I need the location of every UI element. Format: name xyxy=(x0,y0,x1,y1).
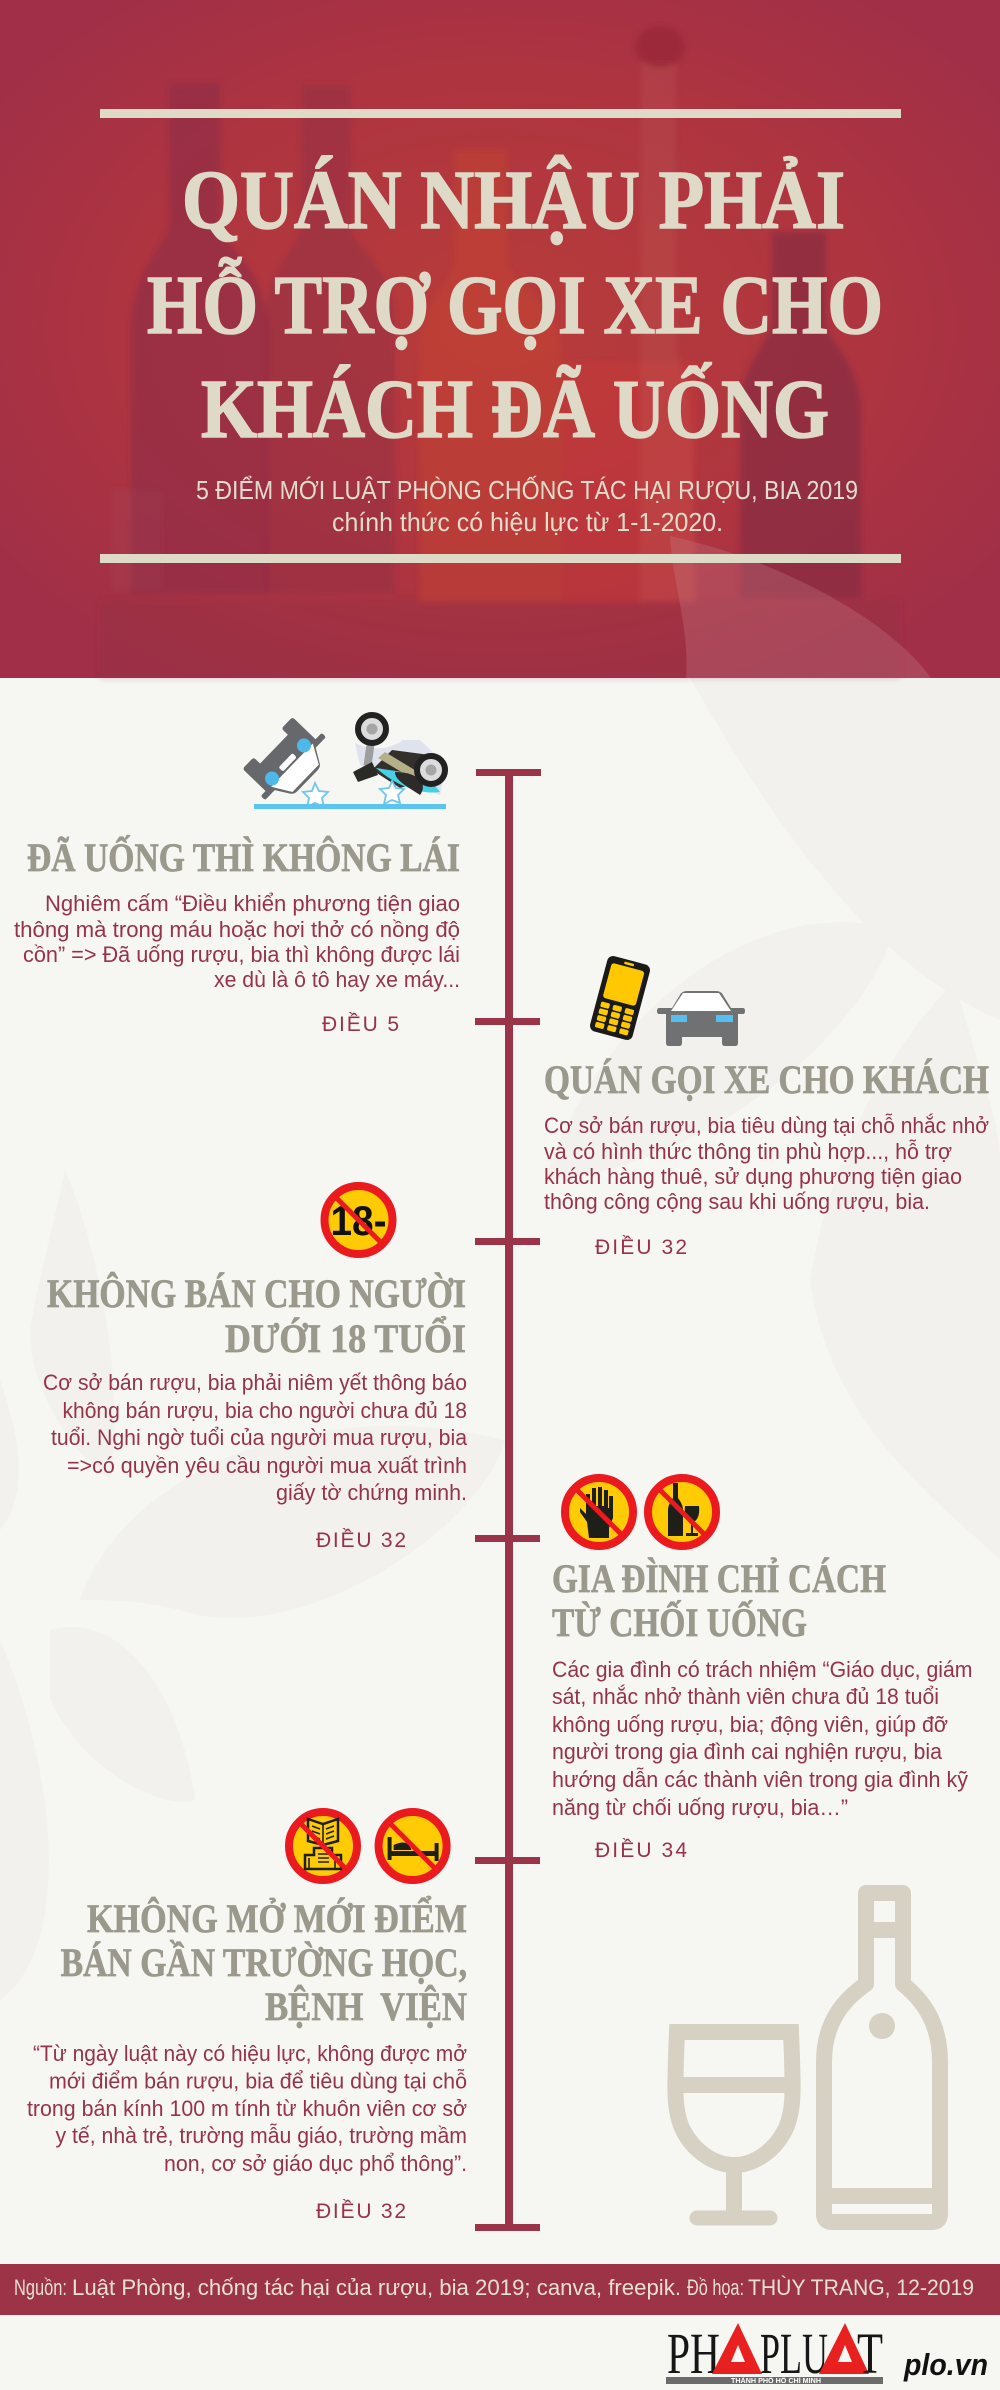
heading xyxy=(552,1556,886,1645)
body text xyxy=(544,1113,989,1214)
panel: drink and do not drive xyxy=(14,711,460,1036)
background leaf pattern xyxy=(0,678,1000,2000)
icon: mobile phone xyxy=(589,955,651,1041)
footer band: Nguồn: xyxy=(14,2275,67,2300)
footer band xyxy=(0,2264,1000,2315)
logo: Pháp Luật: PLU xyxy=(760,2321,828,2386)
body text: giấy tờ chứng minh. xyxy=(276,1480,467,1505)
heading: KHÔNG MỞ MỚI ĐIỂM xyxy=(87,1895,467,1941)
body text: Cơ sở bán rượu, bia phải niêm yết thông báo xyxy=(43,1370,467,1395)
body text: =>có quyền yêu cầu người mua xuất trình xyxy=(67,1453,467,1478)
body text: cồn” => Đã uống rượu, bia thì không được lái xyxy=(23,942,460,967)
icon: road line xyxy=(254,804,446,809)
heading: GIA ĐÌNH CHỈ CÁCH xyxy=(552,1556,886,1601)
footer band: THÙY TRANG, 12-2019 xyxy=(748,2275,974,2300)
heading: BÁN GẦN TRƯỜNG HỌC, xyxy=(61,1940,467,1985)
article reference: ĐIỀU 34 xyxy=(595,1839,687,1862)
title: KHÁCH ĐÃ UỐNG xyxy=(201,361,829,456)
panel: no sale to under 18 xyxy=(43,1186,468,1552)
header banner with bottle photo xyxy=(0,0,1000,678)
heading: KHÔNG BÁN CHO NGƯỜI xyxy=(47,1271,466,1316)
bottle outline xyxy=(824,1893,940,2222)
top header rule xyxy=(100,109,901,118)
title xyxy=(147,154,883,456)
article reference: ĐIỀU 32 xyxy=(316,2200,406,2223)
icon: under 18 prohibited sign: 18- xyxy=(330,1197,386,1244)
icon: car front xyxy=(657,991,745,1046)
logo: Pháp Luật: THÀNH PHỐ HỒ CHÍ MINH xyxy=(731,2375,821,2385)
panel: no new outlets near schools and hospitals xyxy=(27,1812,467,2223)
body text: tuổi. Nghi ngờ tuổi của người mua rượu, bia xyxy=(51,1425,468,1450)
logo: plo.vn: plo.vn xyxy=(903,2347,988,2382)
header leaf highlight xyxy=(670,536,931,678)
bottom header rule xyxy=(100,554,901,563)
body text: trong bán kính 100 m tính từ khuôn viên cơ sở xyxy=(27,2096,467,2121)
wine glass outline xyxy=(675,2032,793,2165)
logo: Pháp Luật: PH xyxy=(667,2321,720,2386)
panel: families teach how to refuse xyxy=(552,1478,972,1862)
article reference: ĐIỀU 32 xyxy=(595,1236,687,1259)
body text: mới điểm bán rượu, bia để tiêu dùng tại chỗ xyxy=(49,2068,467,2094)
title: HỖ TRỢ GỌI XE CHO xyxy=(147,255,883,352)
logo: Pháp Luật: T xyxy=(857,2321,883,2386)
body text: xe dù là ô tô hay xe máy... xyxy=(214,967,460,992)
body text: Cơ sở bán rượu, bia tiêu dùng tại chỗ nhắc nhở xyxy=(544,1113,989,1138)
body text: Nghiêm cấm “Điều khiển phương tiện giao xyxy=(45,891,460,916)
body text: y tế, nhà trẻ, trường mẫu giáo, trường mầm xyxy=(56,2123,467,2148)
title: QUÁN NHẬU PHẢI xyxy=(182,154,845,247)
heading xyxy=(47,1271,466,1361)
body text: khách hàng thuê, sử dụng phương tiện giao xyxy=(544,1164,962,1189)
heading: DƯỚI 18 TUỔI xyxy=(225,1315,466,1361)
heading: TỪ CHỐI UỐNG xyxy=(552,1599,807,1645)
body text: thông mà trong máu hoặc hơi thở có nồng độ xyxy=(14,917,460,942)
body text: năng từ chối uống rượu, bia…” xyxy=(552,1795,848,1820)
article reference: ĐIỀU 5 xyxy=(322,1013,399,1036)
body text: không bán rượu, bia cho người chưa đủ 18 xyxy=(62,1398,467,1423)
body text: người trong gia đình cai nghiện rượu, bia xyxy=(552,1739,943,1764)
logo: Pháp Luật xyxy=(666,2321,883,2386)
heading: ĐÃ UỐNG THÌ KHÔNG LÁI xyxy=(27,834,460,880)
heading xyxy=(61,1895,467,2029)
icon: wine glass and bottle xyxy=(675,1893,942,2222)
icon: overturned motorbike xyxy=(353,715,446,804)
body text: hướng dẫn các thành viên trong gia đình kỹ xyxy=(552,1767,968,1792)
icon: overturned car xyxy=(238,711,338,812)
icon: no hospital bed sign xyxy=(379,1812,447,1880)
article reference: ĐIỀU 32 xyxy=(316,1529,406,1552)
body text: không uống rượu, bia; động viên, giúp đỡ xyxy=(552,1712,948,1737)
body text: Các gia đình có trách nhiệm “Giáo dục, giám xyxy=(552,1657,972,1682)
body text xyxy=(552,1657,972,1820)
icon: no alcohol sign xyxy=(648,1478,716,1546)
subtitle: chính thức có hiệu lực từ 1-1-2020. xyxy=(332,507,723,537)
body text: và có hình thức thông tin phù hợp..., hỗ trợ xyxy=(544,1139,952,1164)
body text xyxy=(14,891,460,992)
timeline xyxy=(475,769,541,2231)
icon: under 18 prohibited sign xyxy=(324,1186,392,1254)
footer band: Luật Phòng, chống tác hại của rượu, bia 2019; canva, freepik. xyxy=(72,2275,681,2300)
subtitle xyxy=(196,475,858,537)
subtitle: 5 ĐIỂM MỚI LUẬT PHÒNG CHỐNG TÁC HẠI RƯỢU, BIA 2019 xyxy=(196,475,858,505)
body text: “Từ ngày luật này có hiệu lực, không được mở xyxy=(33,2041,467,2066)
body text: sát, nhắc nhở thành viên chưa đủ 18 tuổi xyxy=(552,1684,939,1709)
body text xyxy=(27,2041,467,2176)
body text: non, cơ sở giáo dục phổ thông”. xyxy=(164,2151,467,2176)
icon: no school sign xyxy=(289,1812,357,1880)
footer band: Đồ họa: xyxy=(687,2275,744,2300)
panel: bar calls a car for guests xyxy=(544,955,989,1259)
body text: thông công cộng sau khi uống rượu, bia. xyxy=(544,1189,930,1214)
icon: stop hand sign xyxy=(565,1478,633,1546)
bottle silhouettes xyxy=(100,26,900,678)
heading: BỆNH VIỆN xyxy=(265,1984,467,2029)
body text xyxy=(43,1370,468,1505)
